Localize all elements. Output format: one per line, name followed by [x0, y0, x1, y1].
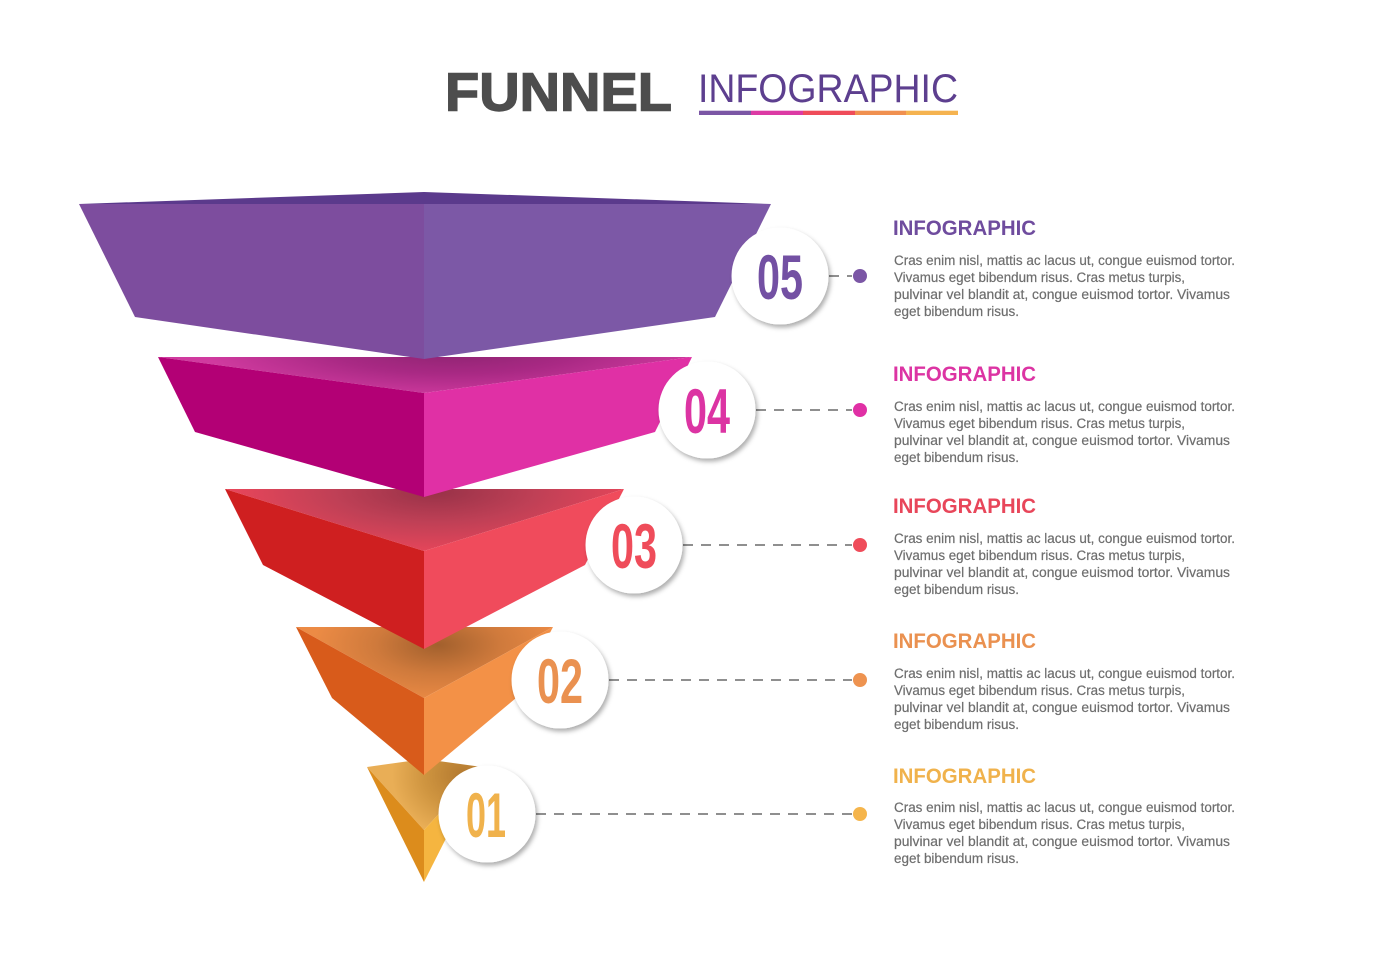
text block 01: Cras enim nisl, mattis ac lacus ut, congue euismod tortor. [894, 800, 1235, 815]
text block 04: pulvinar vel blandit at, congue euismod tortor. Vivamus [894, 433, 1230, 448]
tier 02 orange [296, 627, 553, 775]
step 01 marker [438, 766, 867, 862]
text block 01: pulvinar vel blandit at, congue euismod tortor. Vivamus [894, 834, 1230, 849]
text block 02: pulvinar vel blandit at, congue euismod tortor. Vivamus [894, 700, 1230, 715]
text block 05: eget bibendum risus. [894, 304, 1019, 319]
title word: FUNNEL: FUNNEL [445, 62, 672, 122]
step 01 marker: 01 [466, 781, 506, 851]
text block 05: Vivamus eget bibendum risus. Cras metus turpis, [894, 270, 1185, 285]
text block 03: Vivamus eget bibendum risus. Cras metus turpis, [894, 548, 1185, 563]
tier 01 yellow [367, 759, 482, 882]
text block 03 [893, 495, 1235, 597]
step 03 marker: 03 [611, 512, 657, 582]
text block 02: Vivamus eget bibendum risus. Cras metus turpis, [894, 683, 1185, 698]
step 05 marker: 05 [757, 243, 803, 313]
tier 03 red [225, 489, 624, 649]
text block 03: eget bibendum risus. [894, 582, 1019, 597]
title [445, 62, 958, 122]
text block 01 [893, 765, 1235, 866]
text block 03: INFOGRAPHIC [893, 495, 1036, 518]
tier 04 magenta [158, 357, 692, 497]
text block 05: INFOGRAPHIC [893, 217, 1036, 240]
text block 04: eget bibendum risus. [894, 450, 1019, 465]
text block 04: INFOGRAPHIC [893, 363, 1036, 386]
text block 01: Vivamus eget bibendum risus. Cras metus turpis, [894, 817, 1185, 832]
step 05 marker [732, 228, 867, 324]
text block 05 [893, 217, 1235, 319]
title underline [699, 111, 958, 115]
text block 01: eget bibendum risus. [894, 851, 1019, 866]
step 02 marker [512, 632, 867, 728]
text block 01: INFOGRAPHIC [893, 765, 1036, 788]
text block 05: Cras enim nisl, mattis ac lacus ut, congue euismod tortor. [894, 253, 1235, 268]
text block 02: INFOGRAPHIC [893, 630, 1036, 653]
title word: INFOGRAPHIC: INFOGRAPHIC [698, 67, 958, 111]
step 02 marker: 02 [537, 647, 583, 717]
funnel [79, 192, 771, 882]
text block 04: Cras enim nisl, mattis ac lacus ut, congue euismod tortor. [894, 399, 1235, 414]
text block 02: eget bibendum risus. [894, 717, 1019, 732]
text block 04: Vivamus eget bibendum risus. Cras metus turpis, [894, 416, 1185, 431]
text block 04 [893, 363, 1235, 465]
text block 03: Cras enim nisl, mattis ac lacus ut, congue euismod tortor. [894, 531, 1235, 546]
text block 05: pulvinar vel blandit at, congue euismod tortor. Vivamus [894, 287, 1230, 302]
text block 02: Cras enim nisl, mattis ac lacus ut, congue euismod tortor. [894, 666, 1235, 681]
step 04 marker: 04 [684, 377, 730, 447]
step 03 marker [586, 496, 867, 594]
tier 05 purple [79, 192, 771, 359]
text block 02 [893, 630, 1235, 732]
step 04 marker [658, 362, 867, 458]
text block 03: pulvinar vel blandit at, congue euismod tortor. Vivamus [894, 565, 1230, 580]
